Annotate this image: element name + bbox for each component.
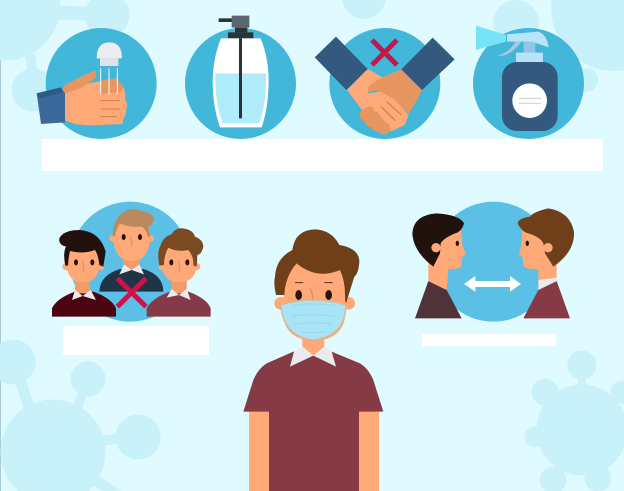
icon: keep distance — [412, 202, 574, 322]
right person — [147, 228, 211, 317]
icon: soap pump bottle — [185, 16, 296, 139]
face mask — [281, 300, 346, 340]
icon: hand washing — [37, 28, 157, 139]
background virus: top left — [0, 0, 129, 111]
text bar: top — [42, 139, 603, 171]
icon: avoid crowds — [52, 202, 211, 322]
text bar: distance — [422, 334, 556, 346]
icon: no handshake — [315, 28, 455, 139]
right profile person — [518, 208, 574, 318]
background virus: bottom left — [0, 340, 160, 491]
icon: disinfectant spray bottle — [473, 26, 584, 139]
left profile person — [412, 213, 466, 318]
red cross — [117, 278, 146, 307]
background virus: top right — [342, 0, 624, 92]
main figure wearing mask — [243, 229, 383, 491]
double arrow — [464, 276, 521, 292]
background virus: bottom right — [525, 351, 624, 491]
center person — [99, 209, 163, 292]
text bar: crowds — [63, 326, 209, 355]
left person — [52, 230, 116, 317]
